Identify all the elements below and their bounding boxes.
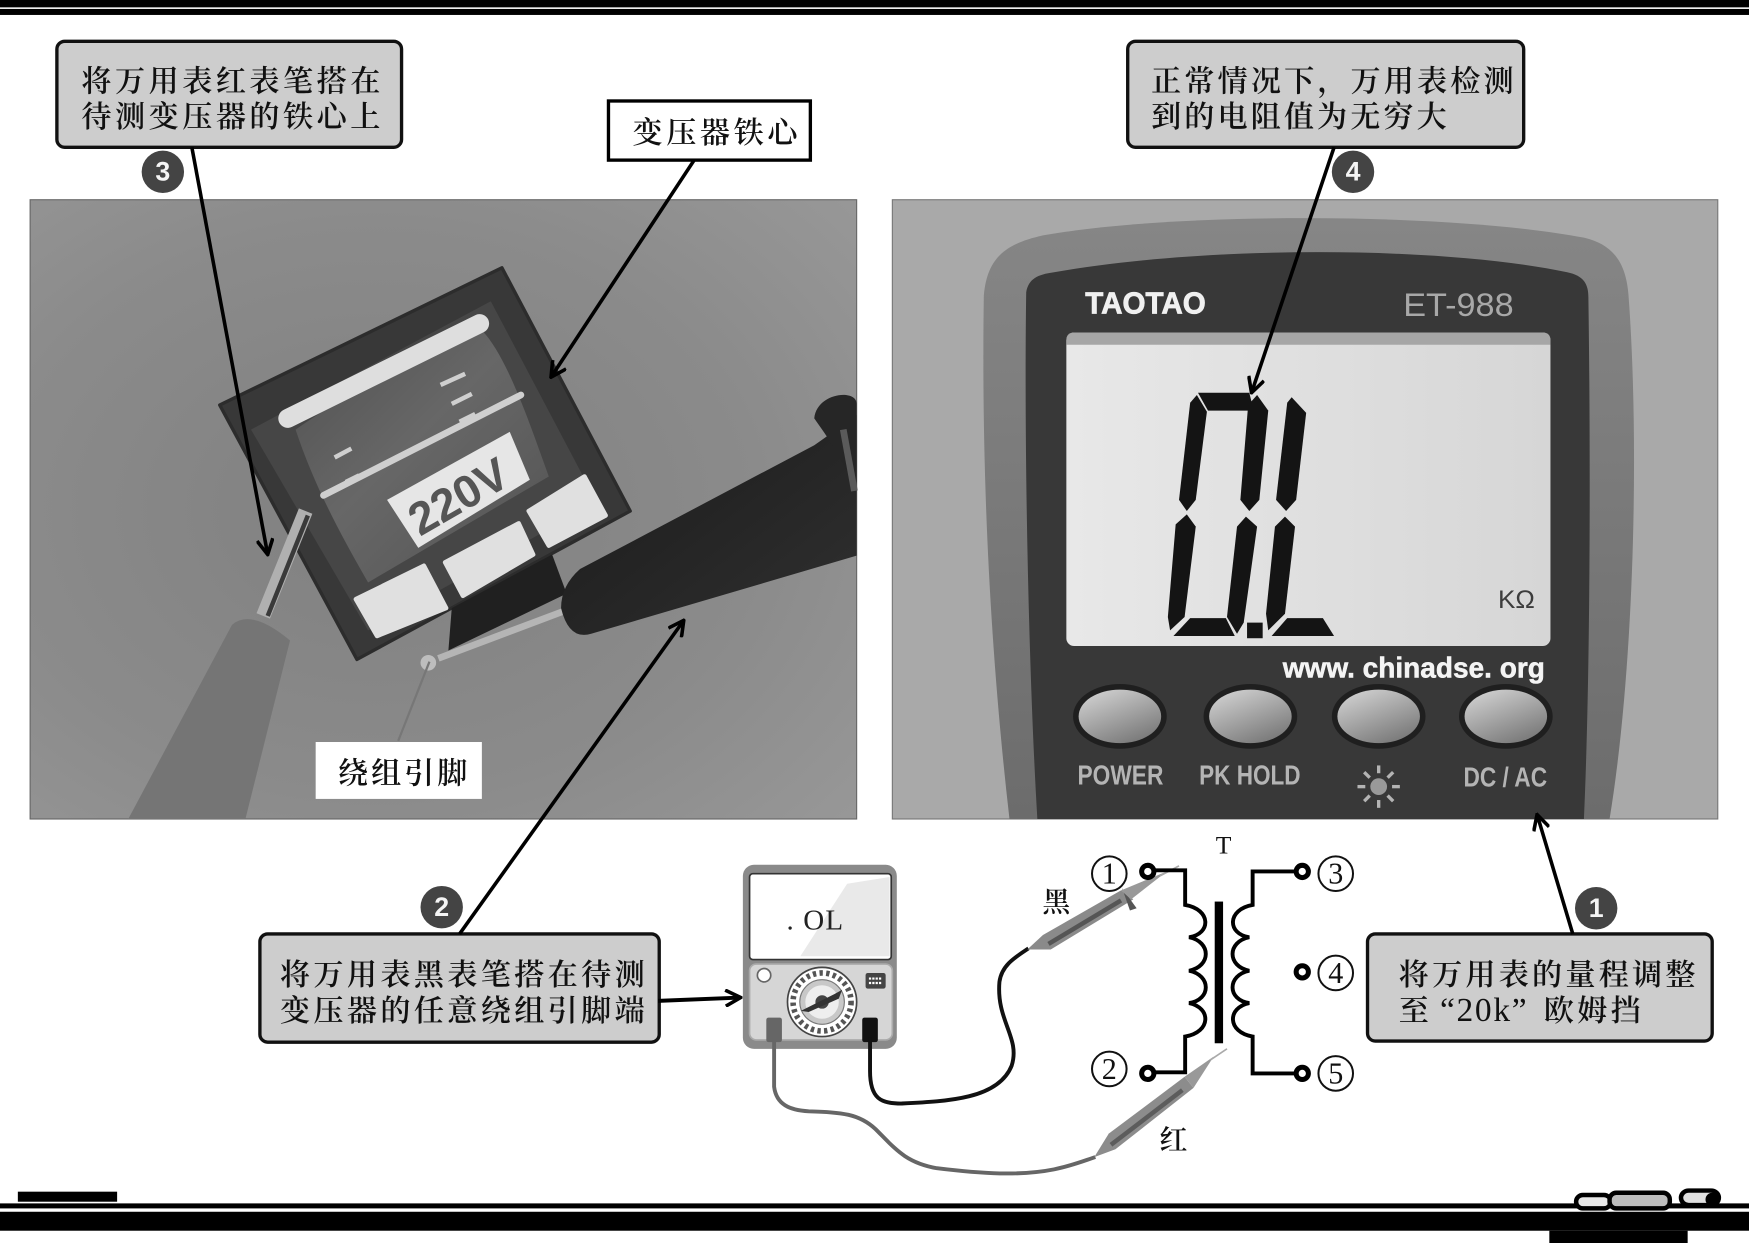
label: transformer core [608, 101, 810, 160]
photo: winding lead wire [398, 662, 429, 741]
meter rubber housing [983, 218, 1634, 819]
callout 1: set range: 至 [1399, 994, 1429, 1028]
callout 4: normal reading: 到的电阻值为无穷大 [1151, 100, 1447, 134]
black test lead [870, 948, 1028, 1104]
terminal numbers: 2 [1102, 1052, 1117, 1086]
step badge 1: 1 [1589, 893, 1604, 923]
transformer schematic [1092, 831, 1353, 1091]
button labels: PK HOLD [1199, 759, 1301, 790]
arrow: callout 1 to DC/AC [1537, 815, 1573, 934]
step badge 2 [421, 886, 463, 928]
step badge 3 [142, 151, 184, 193]
brand text: TAOTAO [1085, 288, 1206, 321]
callout 4: normal reading [1128, 41, 1524, 147]
meter hold button [757, 969, 771, 982]
callout 1: set range: “20k” [1440, 992, 1528, 1029]
button labels [1078, 759, 1547, 793]
callout 3: red probe on core: 将万用表红表笔搭在 [81, 64, 380, 98]
step badge 2: 2 [434, 892, 449, 922]
primary winding [1154, 870, 1206, 1072]
label: red: 红 [1160, 1124, 1187, 1156]
callout 2: black probe on pin: 将万用表黑表笔搭在待测 [280, 958, 645, 992]
label: winding pins [316, 742, 482, 799]
meter dial [787, 967, 857, 1037]
top header rule [0, 0, 1749, 15]
meter front panel [1026, 252, 1590, 819]
secondary winding [1233, 871, 1295, 1073]
footer pen icon [1576, 1191, 1719, 1208]
bottom footer rule [0, 1203, 1749, 1243]
arrow: callout 2 to pin [460, 620, 684, 934]
arrow: core label to core [551, 161, 694, 377]
meter small icon [866, 973, 886, 989]
schematic T label: T [1216, 831, 1232, 860]
red test lead [774, 1038, 1095, 1173]
label: black: 黑 [1042, 887, 1071, 919]
callout 1: set range [1368, 934, 1712, 1041]
LCD unit: KΩ [1498, 587, 1535, 614]
photo: coil body [296, 330, 549, 582]
label: winding pins: 绕组引脚 [338, 756, 467, 790]
photo: dark gap between pins [448, 555, 567, 651]
black probe drawing [1027, 866, 1179, 950]
panel: multimeter photo [892, 200, 1718, 819]
step badge 1 [1575, 887, 1617, 929]
photo: iron core plate [220, 268, 630, 659]
terminal nodes [1142, 865, 1308, 1080]
callout 1: set range: 欧姆挡 [1544, 994, 1644, 1028]
photo: black probe [421, 395, 857, 671]
terminal numbers: 5 [1328, 1056, 1343, 1090]
callout 4: normal reading: 正常情况下，万用表检测 [1151, 64, 1514, 99]
photo: red probe [128, 511, 308, 819]
meter lower panel [750, 964, 892, 1040]
terminal numbers [1092, 856, 1353, 1091]
footer left tab [18, 1192, 117, 1202]
photo: 220V label: 220V [400, 448, 518, 545]
photo: 220V label [387, 432, 530, 548]
schematic multimeter [743, 865, 897, 1049]
LCD screen [1066, 333, 1550, 646]
callout 3: red probe on core: 待测变压器的铁心上 [81, 100, 380, 134]
model text: ET-988 [1403, 287, 1514, 323]
photo: white bobbin blocks [356, 476, 606, 636]
terminal numbers: 4 [1328, 956, 1343, 990]
photo: coil highlights [335, 374, 475, 482]
terminal numbers: 3 [1328, 857, 1343, 891]
label: transformer core: 变压器铁心 [632, 116, 800, 150]
callout 2: black probe on pin [260, 934, 659, 1042]
LCD reading OL [1168, 393, 1334, 638]
terminal numbers: 1 [1102, 857, 1117, 891]
callout 3: red probe on core [57, 41, 402, 147]
core bar [1215, 902, 1223, 1043]
callout 2: black probe on pin: 变压器的任意绕组引脚端 [280, 994, 645, 1028]
callout 1: set range: 将万用表的量程调整 [1399, 958, 1695, 992]
meter jacks [766, 1018, 878, 1042]
panel: transformer photo [30, 200, 857, 819]
red probe drawing [1094, 1049, 1227, 1157]
button labels: DC / AC [1463, 762, 1547, 793]
arrow: callout 3 to core [192, 147, 268, 555]
arrow: callout 2 to schematic meter [658, 998, 741, 1001]
step badge 4: 4 [1346, 157, 1361, 187]
icon: backlight sun [1357, 765, 1400, 808]
button labels: POWER [1078, 759, 1163, 790]
meter screen [750, 874, 891, 960]
step badge 4 [1332, 151, 1374, 193]
website text: www. chinadse. org [1282, 652, 1545, 684]
meter buttons [1073, 684, 1553, 749]
photo: white cords [288, 324, 521, 495]
arrow: callout 4 to display [1252, 147, 1334, 393]
meter screen: . OL [787, 904, 844, 936]
step badge 3: 3 [155, 157, 170, 187]
